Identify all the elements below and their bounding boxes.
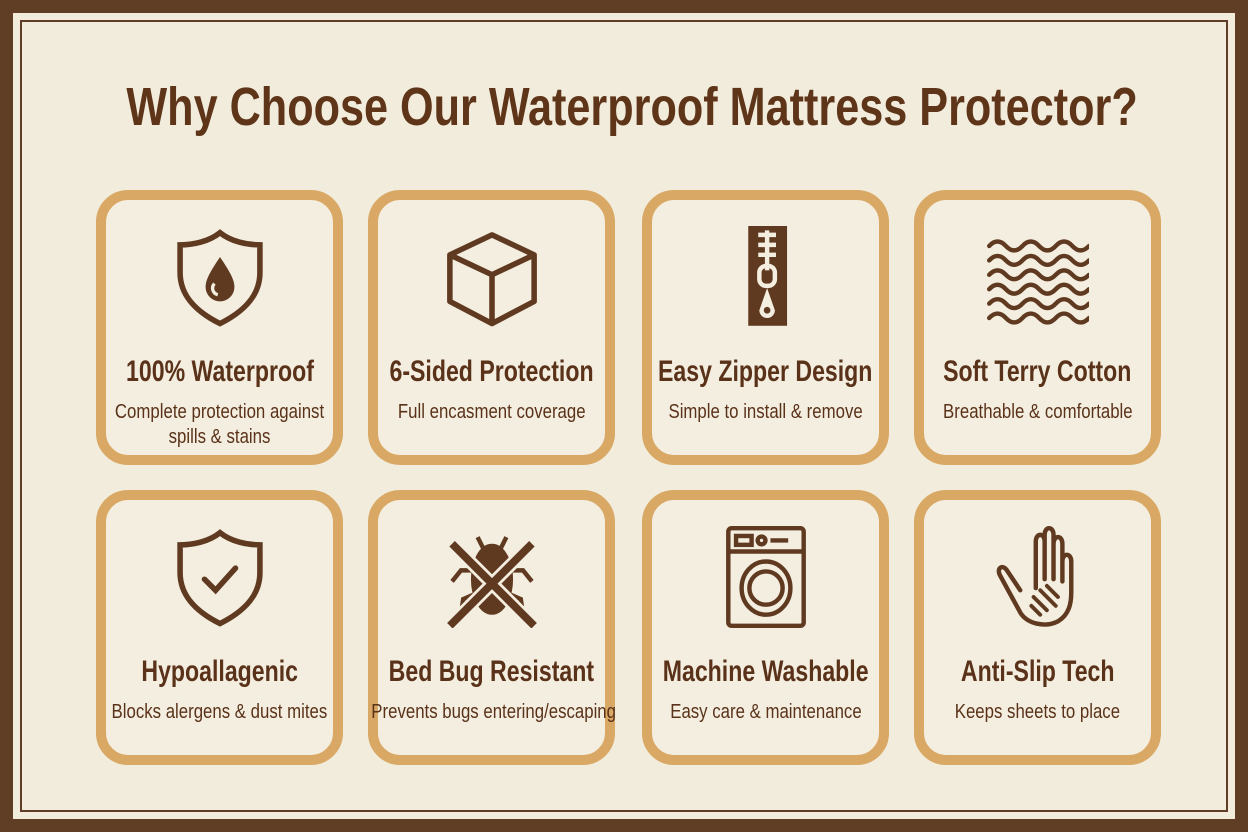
text: Complete protection against [115, 401, 324, 423]
icon: cube [447, 232, 537, 326]
icon: zipper [748, 226, 788, 326]
title: Why Choose Our Waterproof Mattress Protector? [126, 77, 1138, 137]
heading: Bed Bug Resistant [389, 655, 594, 688]
card: 6-Sided Protection [368, 190, 615, 465]
heading: Easy Zipper Design [658, 355, 873, 388]
text: Prevents bugs entering/escaping [371, 701, 616, 723]
text: Blocks alergens & dust mites [112, 701, 327, 723]
text: Simple to install & remove [668, 401, 863, 423]
icon: waves [987, 239, 1089, 325]
card: Hypoallagenic [96, 490, 343, 765]
card: Soft Terry Cotton [914, 190, 1161, 465]
heading: Soft Terry Cotton [943, 355, 1132, 388]
heading: Anti-Slip Tech [961, 655, 1114, 688]
text: spills & stains [169, 426, 270, 448]
card: 100% Waterproof [96, 190, 343, 465]
text: Full encasment coverage [398, 401, 585, 423]
heading: Hypoallagenic [141, 655, 298, 688]
icon: shield check [177, 529, 263, 627]
text: Keeps sheets to place [955, 701, 1120, 723]
text: Easy care & maintenance [670, 701, 861, 723]
heading: 100% Waterproof [126, 355, 313, 388]
text [115, 401, 324, 448]
text: Breathable & comfortable [943, 401, 1132, 423]
icon: shield with water drop [177, 229, 263, 327]
heading: Machine Washable [663, 655, 868, 688]
icon: washing machine [726, 526, 806, 628]
card: Machine Washable [642, 490, 889, 765]
card: Easy Zipper Design [642, 190, 889, 465]
icon: hand [996, 526, 1074, 627]
heading: 6-Sided Protection [389, 355, 594, 388]
card: Anti-Slip Tech [914, 490, 1161, 765]
icon: crossed bug [447, 536, 537, 628]
card: Bed Bug Resistant [368, 490, 615, 765]
